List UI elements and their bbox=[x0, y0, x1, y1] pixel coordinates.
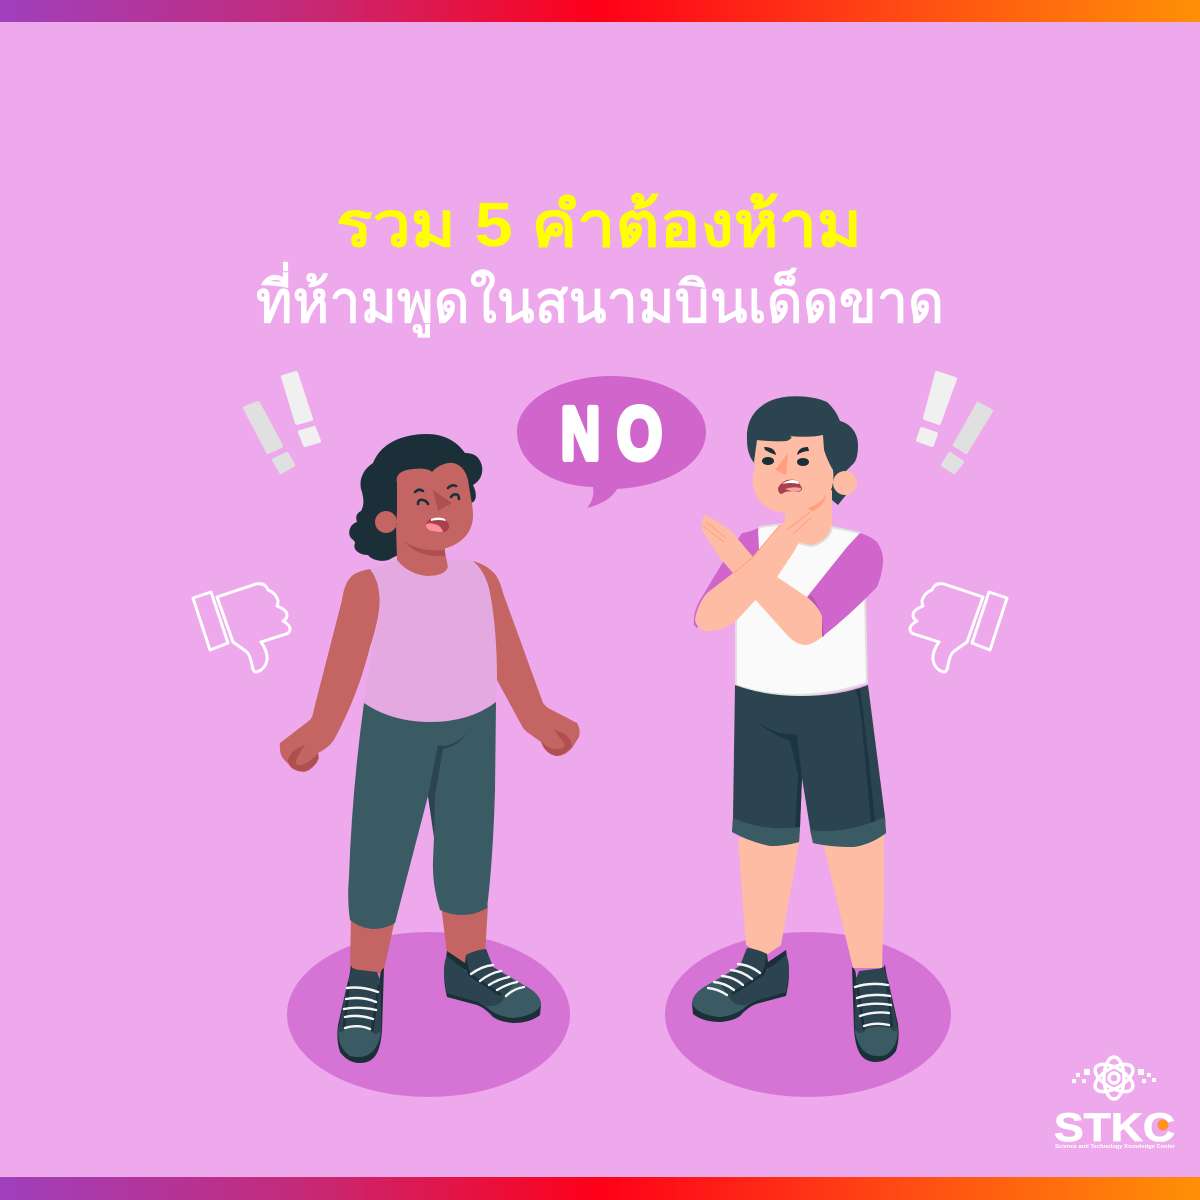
forearm, upper arm with hand bbox=[695, 510, 814, 631]
left shoe bbox=[337, 965, 384, 1063]
left fist shadow bbox=[288, 745, 318, 772]
hair bbox=[747, 396, 858, 505]
right leg bbox=[822, 832, 884, 968]
sleeve shadow bbox=[807, 595, 824, 637]
ear bbox=[375, 511, 397, 533]
eyes bbox=[415, 485, 459, 504]
nose bbox=[775, 453, 788, 475]
right arm bbox=[473, 561, 580, 756]
tank top bbox=[364, 560, 497, 722]
icon: exclamation marks left bbox=[245, 373, 319, 472]
capri pants bbox=[348, 702, 496, 929]
logo orange dot bbox=[1158, 1120, 1168, 1130]
forearm, lower arm bbox=[702, 515, 822, 645]
ear bbox=[833, 471, 857, 495]
neck bbox=[396, 525, 448, 576]
right shoe bbox=[852, 964, 899, 1062]
speech bubble bbox=[517, 376, 706, 508]
title line 1: รวม 5 คำต้องห้าม bbox=[336, 191, 862, 260]
eyes and brows bbox=[762, 447, 809, 466]
character: woman bbox=[280, 434, 580, 1063]
bottom gradient bar bbox=[0, 1177, 1200, 1200]
character: man bbox=[692, 396, 899, 1062]
sleeve left bbox=[694, 528, 760, 628]
icon: thumbs down left bbox=[193, 584, 290, 672]
neck shadow bbox=[808, 495, 826, 512]
ground shadow right bbox=[665, 932, 951, 1097]
pants fold bbox=[428, 729, 470, 837]
neck bbox=[785, 490, 832, 547]
sleeve right bbox=[807, 533, 883, 637]
right leg bbox=[441, 905, 488, 966]
hair bbox=[349, 434, 482, 561]
left leg bbox=[350, 915, 396, 974]
icon: exclamation marks right bbox=[918, 373, 991, 472]
shorts side stripe bbox=[855, 689, 875, 823]
logo atom icon bbox=[1091, 1057, 1137, 1099]
title bbox=[256, 191, 944, 337]
mouth bbox=[426, 518, 449, 532]
title line 2: ที่ห้ามพูดในสนามบินเด็ดขาด bbox=[256, 262, 944, 337]
face bbox=[753, 435, 833, 513]
nose bbox=[433, 490, 452, 511]
logo wordmark: STKC bbox=[1054, 1106, 1175, 1150]
t-shirt bbox=[736, 524, 867, 695]
left shoe bbox=[692, 948, 789, 1022]
ground shadow left bbox=[287, 932, 570, 1097]
logo tagline: Science and Technology Knowledge Center bbox=[1055, 1144, 1176, 1150]
left arm bbox=[280, 569, 380, 772]
logo pixel dots bbox=[1072, 1069, 1156, 1083]
hand lines bbox=[703, 512, 811, 573]
shorts bbox=[732, 685, 886, 847]
NO label: O bbox=[617, 392, 662, 475]
top gradient bar bbox=[0, 0, 1200, 22]
right fist shadow bbox=[541, 730, 572, 756]
NO label: N bbox=[561, 392, 600, 475]
shorts right cuff bbox=[810, 817, 886, 847]
neck shadow bbox=[404, 541, 445, 556]
logo: STKC bbox=[1054, 1057, 1176, 1150]
shorts folds bbox=[750, 711, 802, 828]
left leg bbox=[738, 838, 800, 956]
mouth bbox=[778, 480, 802, 494]
face bbox=[397, 463, 473, 550]
shorts left cuff bbox=[732, 818, 800, 846]
right shoe bbox=[444, 949, 541, 1023]
icon: thumbs down right bbox=[910, 584, 1007, 672]
